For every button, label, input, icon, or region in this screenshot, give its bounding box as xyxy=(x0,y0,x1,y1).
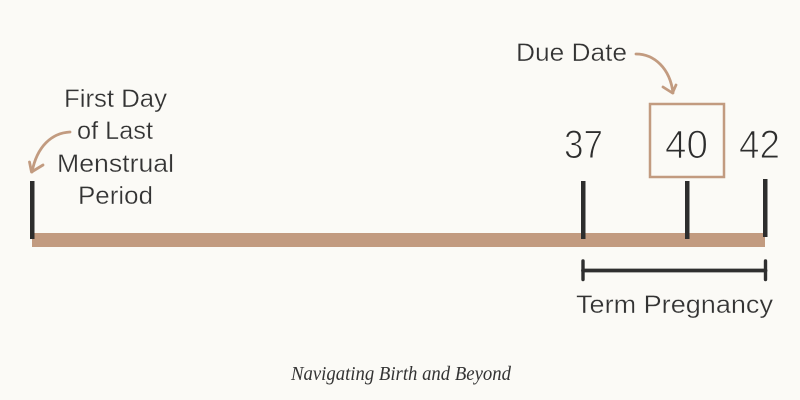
label: term pregnancy: Term Pregnancy xyxy=(576,291,774,319)
number 42: 42 xyxy=(739,123,780,167)
arrow: to due date box xyxy=(636,54,676,93)
arrow: to first day tick xyxy=(30,132,70,172)
timeline bar xyxy=(32,233,765,247)
label: due date: Due Date xyxy=(516,39,627,67)
tick: week 37 xyxy=(581,181,586,239)
tick: week 40 xyxy=(685,181,690,239)
due date box xyxy=(650,104,724,177)
label: first day of last menstrual period: Menstrual xyxy=(57,150,174,178)
label: first day of last menstrual period: of Last xyxy=(77,117,153,145)
term pregnancy bracket xyxy=(583,261,766,280)
tick: week 42 xyxy=(763,179,768,237)
number 40: 40 xyxy=(665,123,708,167)
label: first day of last menstrual period xyxy=(57,85,174,210)
number 37: 37 xyxy=(564,123,603,167)
footer signature: Navigating Birth and Beyond xyxy=(290,363,512,385)
tick: first day xyxy=(30,181,34,239)
label: first day of last menstrual period: Period xyxy=(78,182,153,210)
label: first day of last menstrual period: First Day xyxy=(64,85,168,113)
